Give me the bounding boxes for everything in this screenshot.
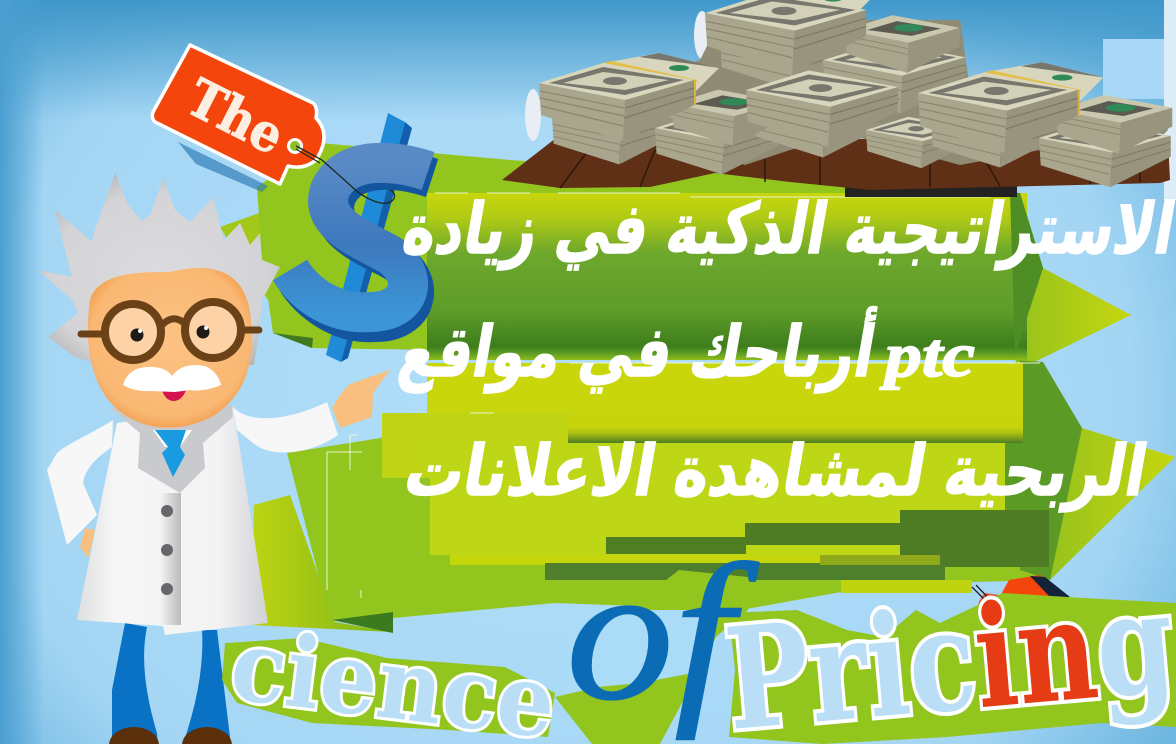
tie [155, 430, 186, 477]
back panel left upper [220, 212, 268, 300]
eyes [130, 326, 210, 342]
lettering: Science of Pricing [225, 525, 1176, 744]
light patch behind of [565, 610, 700, 690]
green ribbon banner [220, 143, 1175, 633]
hair [38, 173, 280, 365]
pointing hand [332, 370, 390, 428]
main upper panel [257, 143, 1043, 360]
partial red tag behind lettering [972, 575, 1070, 623]
coat body [77, 407, 268, 635]
rear hand [80, 528, 95, 558]
glasses [81, 302, 259, 360]
band three [430, 443, 1005, 555]
back panel left lower [252, 495, 392, 632]
band three left tab [382, 413, 568, 478]
mouth [162, 390, 186, 401]
cash bundles [525, 0, 1172, 187]
tag body [152, 45, 324, 184]
left sleeve [47, 420, 113, 545]
green patch: of [555, 570, 748, 744]
tag string [296, 146, 395, 203]
dollar S depth [296, 170, 432, 322]
right sleeve [233, 402, 338, 452]
band one [427, 193, 1027, 360]
dollar bar [326, 113, 405, 362]
icon: dollar sign [290, 113, 432, 362]
left leg [112, 623, 158, 744]
title line 2 latin: ptc [879, 322, 975, 390]
arrow tip lower [1030, 428, 1175, 582]
wooden platform [502, 138, 1170, 197]
green patch: cience [222, 638, 555, 737]
face [88, 268, 251, 428]
main lower panel [287, 430, 1048, 620]
filler mass of stacked bills [550, 20, 1168, 172]
right dark fold [1000, 193, 1082, 580]
right leg [183, 630, 230, 744]
tag shadow [178, 142, 268, 192]
arrow tip upper [1000, 268, 1131, 370]
dollar S face [290, 163, 428, 312]
tag label: The [177, 67, 294, 167]
price tag [152, 45, 395, 203]
upper fold [273, 333, 313, 348]
shoes [109, 727, 232, 744]
lower fold [332, 612, 393, 633]
green patch: pricing [729, 593, 1176, 744]
collar [110, 400, 233, 493]
moustache [123, 365, 221, 392]
tag eyelet [288, 140, 302, 152]
word: of: of [566, 525, 759, 741]
coat buttons [161, 505, 173, 595]
money pile [502, 0, 1172, 197]
Arabic title [393, 188, 1176, 512]
band two [427, 363, 1023, 443]
shirt [153, 430, 192, 447]
scientist character [38, 173, 390, 744]
title line 2: أرباحك في مواقع [393, 307, 882, 394]
